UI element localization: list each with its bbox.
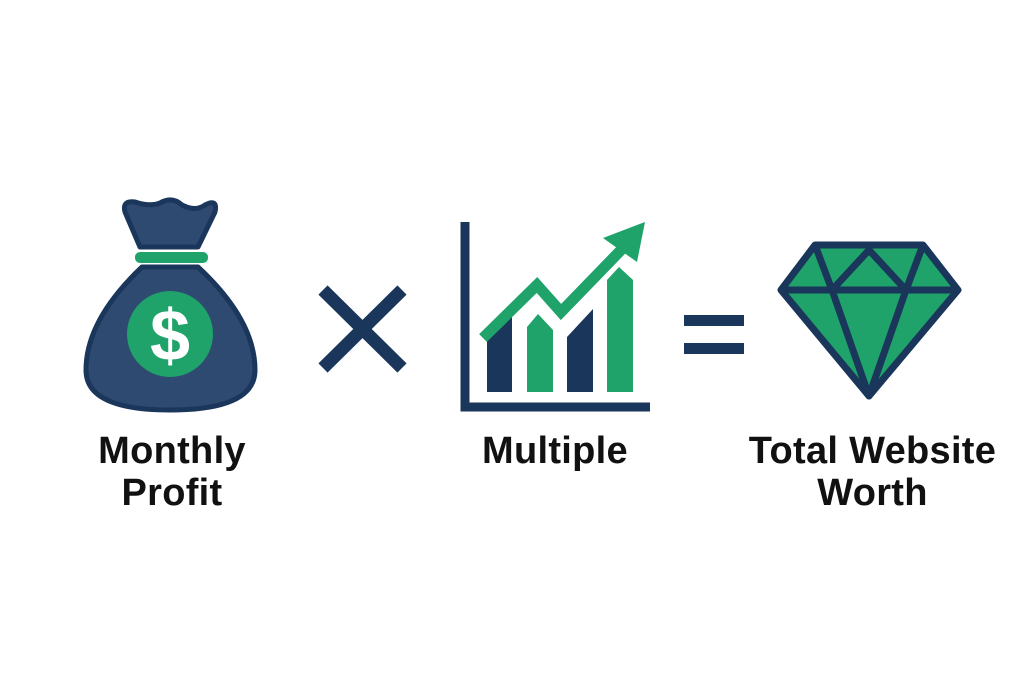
- icon: equals sign: [684, 315, 744, 354]
- icon: multiply sign: [323, 290, 402, 368]
- label: Monthly Profit: Monthly: [98, 430, 246, 472]
- label: Total Website Worth: Total Website: [749, 430, 996, 472]
- icon: growth chart: [465, 222, 650, 407]
- label: Monthly Profit: Profit: [121, 472, 222, 514]
- label: Total Website Worth: [749, 430, 996, 514]
- label: Monthly Profit: [98, 430, 246, 514]
- icon: money bag: [86, 200, 255, 410]
- icon: money bag: $: [150, 296, 190, 376]
- label: Total Website Worth: Worth: [817, 472, 928, 514]
- icon: diamond: [781, 245, 958, 396]
- label: Multiple: Multiple: [482, 430, 628, 472]
